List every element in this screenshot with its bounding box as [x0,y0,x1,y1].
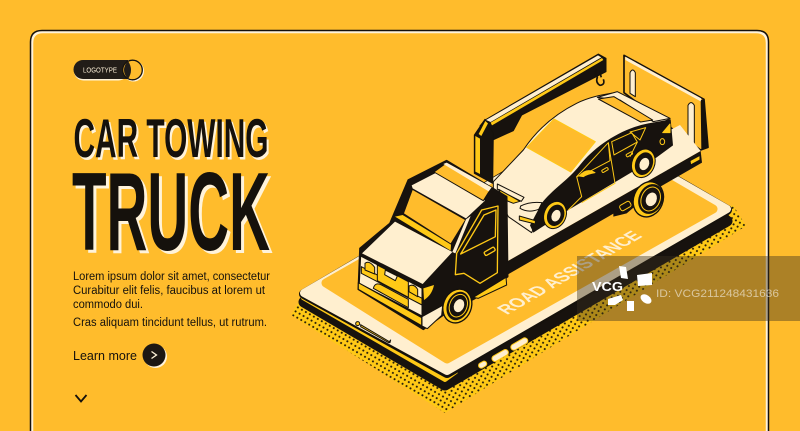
side marker [423,285,434,300]
title: TRUCK [75,153,273,277]
tow truck rear: bed, crane and car [480,54,708,274]
flatbed [500,125,702,274]
bumper [358,283,422,326]
crane post [474,119,493,183]
side buttons [478,337,529,369]
car roof and hood [493,93,670,233]
car trunk edge [597,92,670,122]
road assistance label: ROAD ASSISTANCE [493,228,647,318]
title: CAR TOWING [74,107,268,169]
sill [473,277,507,298]
car front wheel [540,198,570,232]
watermark logo: VCG [592,279,623,294]
scroll chevron icon [76,395,86,402]
door [455,206,498,283]
side windows and doors [568,124,670,210]
windshield [395,190,465,251]
phone face [304,128,727,373]
watermark logo [592,266,653,311]
phone yellow edge [303,292,456,380]
rear wheel [628,177,669,222]
title [72,107,273,277]
body text: Lorem ipsum dolor sit amet, consectetur [73,271,270,283]
crane [480,54,606,140]
body text [73,271,270,329]
tailboard [624,55,708,150]
body text: Cras aliquam tincidunt tellus, ut rutrum. [73,317,267,329]
phone screen [326,135,713,359]
body text: Curabitur elit felis, faucibus at lorem ut [73,285,266,297]
windshield [527,119,595,172]
body text: commodo dui. [73,299,143,311]
smartphone [303,128,727,385]
car [493,92,673,233]
learn more button [73,344,167,368]
cab side cream pillar [452,216,471,253]
title: CAR TOWING [76,110,270,172]
halftone shadow [291,205,746,413]
phone body [304,140,727,385]
car body side [530,119,673,233]
cab silhouette [358,161,508,329]
watermark [577,256,800,321]
hood [362,222,452,284]
speaker [356,322,391,343]
title: TRUCK [72,150,270,274]
car rear wheel [627,145,659,181]
watermark: ID: VCG211248431636 [656,288,779,300]
front grille [359,256,422,316]
roof light bar [434,163,492,201]
cab roof [412,172,485,218]
logotype badge: LOGOTYPE [83,68,117,74]
tow truck cab [358,119,508,329]
logotype badge [74,60,144,82]
front wheel [438,285,477,327]
learn more button: Learn more [73,348,137,363]
car front details [497,184,542,224]
